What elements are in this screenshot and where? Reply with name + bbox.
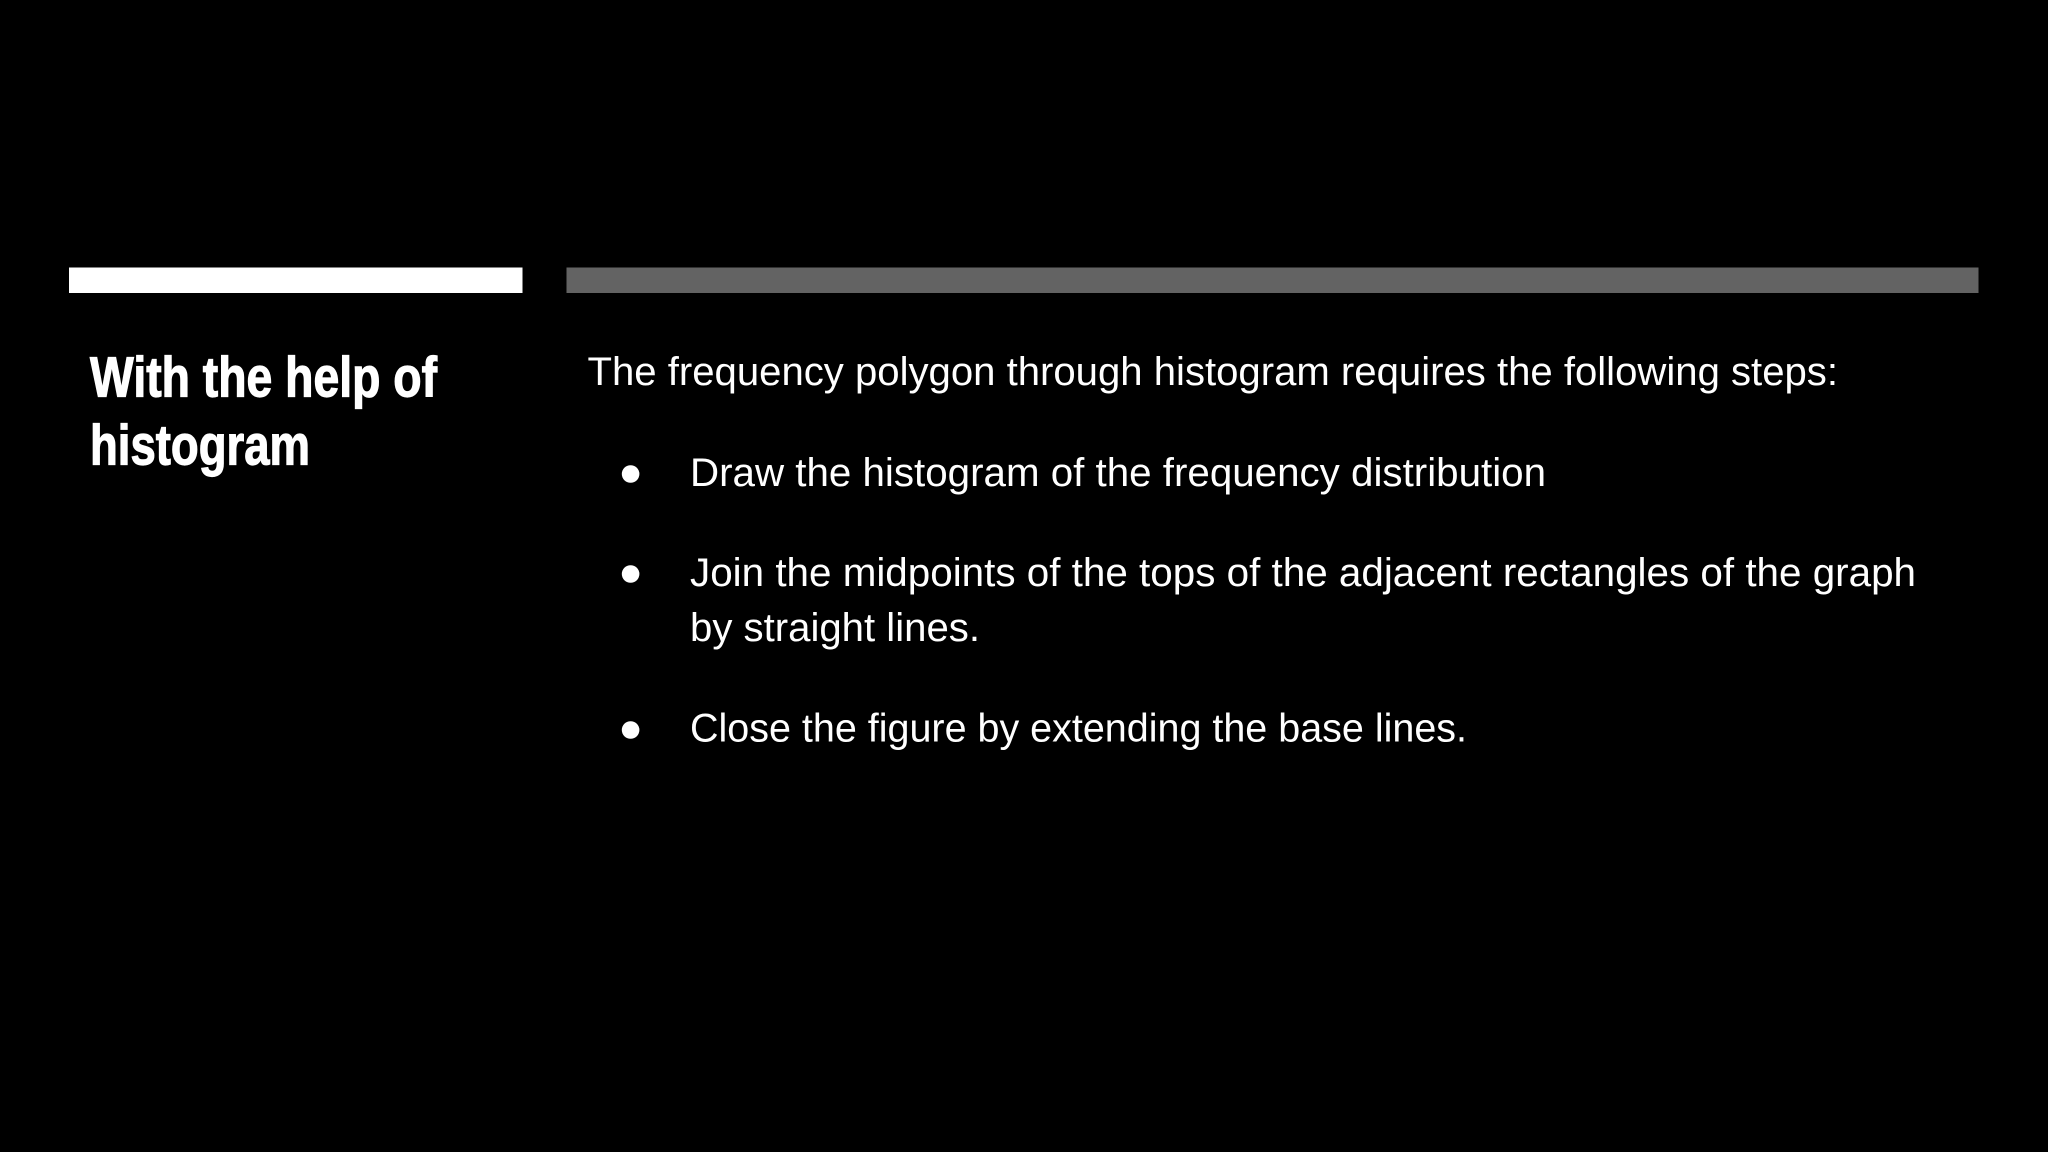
- grey accent bar: [566, 268, 1978, 293]
- step 2: Join the midpoints of the tops of the adjacent rectangles of the graph: [690, 551, 1916, 595]
- step 1: Draw the histogram of the frequency distribution: [690, 451, 1546, 495]
- step 3: Close the figure by extending the base lines.: [690, 706, 1467, 750]
- bullet list: [622, 451, 1916, 750]
- step 2: [622, 551, 1916, 650]
- intro text: The frequency polygon through histogram requires the following steps:: [588, 350, 1838, 394]
- heading: With the help of: [90, 346, 438, 410]
- white accent bar: [69, 268, 522, 293]
- heading: [90, 346, 438, 478]
- heading: histogram: [90, 414, 310, 478]
- step 2: by straight lines.: [690, 606, 980, 650]
